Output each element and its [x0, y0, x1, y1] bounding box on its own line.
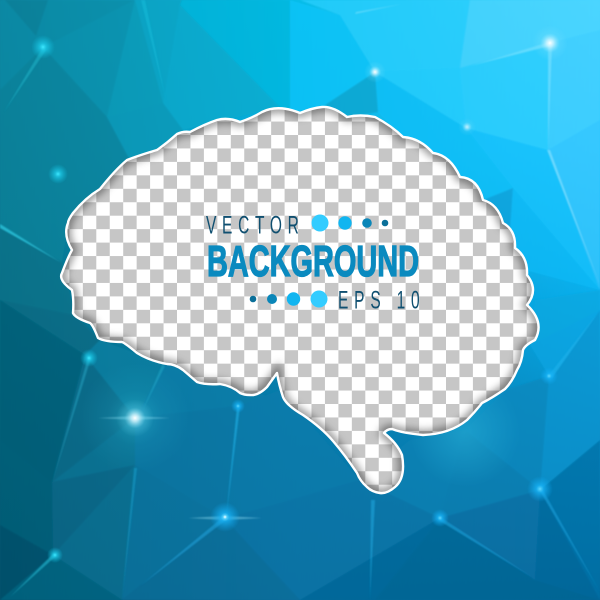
word: VECTOR: VECTOR — [206, 212, 304, 240]
background: soft light patches — [80, 363, 520, 487]
word: BACKGROUND: BACKGROUND — [207, 237, 419, 286]
brain cut-out with checker pattern — [61, 107, 539, 493]
bottom dots — [250, 290, 328, 308]
heading block — [206, 212, 425, 315]
word: EPS 10: EPS 10 — [338, 287, 425, 315]
top dots — [312, 214, 388, 232]
